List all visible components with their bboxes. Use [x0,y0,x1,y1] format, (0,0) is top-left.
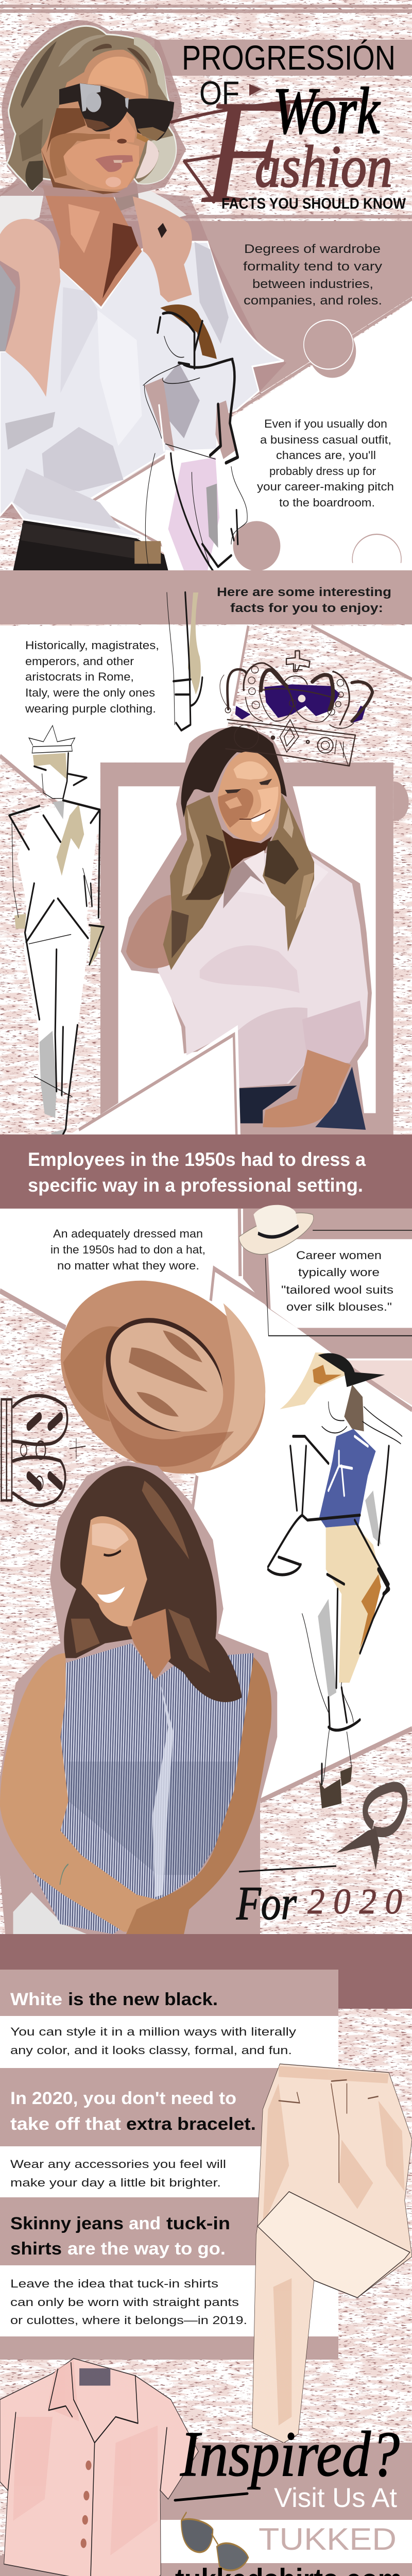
left hair [163,795,232,970]
heading: white is the new black [10,1990,218,2009]
heading: skinny jeans: are the way to go. [67,2239,226,2259]
illustration: beige trousers [252,2064,412,2443]
text block: business casual: chances are, you'll [276,449,376,462]
panel: purple clothing shapes [0,626,412,1134]
face [81,1516,147,1626]
title: For 2020 [236,1866,402,1929]
illustration: woman in white shirt, body [0,181,286,570]
text block: career women: over silk blouses." [286,1300,392,1313]
white trousers [13,1892,87,1934]
scarf ties [329,1436,368,1496]
text block: wardrobe formality [243,242,382,308]
heading: interesting facts [217,585,391,615]
line work [268,1402,402,1784]
illustration: cream hat [239,1205,314,1255]
ring [158,223,167,238]
heading: extra bracelet [10,2089,256,2134]
illustration: pink shirt [0,2359,198,2576]
ear gap [135,140,159,179]
text block: business casual [257,417,394,509]
title: Fashion: ashion [255,134,392,199]
sketch figure: lower legs [167,592,202,731]
text block: white: You can style it in a million ways with literally [10,2025,296,2038]
illustration: woman in white shirt, hands and sketch overlay [0,196,247,570]
shirt wash [13,2361,158,2555]
trousers [318,1490,381,1698]
text block: white: any color, and it looks classy, formal, and fun. [10,2044,292,2057]
halo [121,727,372,1134]
eyes [225,779,272,793]
icon: play triangle [249,84,265,96]
heading: skinny jeans: and [129,2214,161,2233]
text block: tuck-in [10,2277,247,2327]
placket [152,1683,174,1897]
shirt shading [0,242,229,529]
face tones [218,761,278,835]
text block: white [10,2025,296,2057]
text block: accessories [10,2158,226,2189]
sketch figure: skin and torso [145,378,236,459]
hat light rim [210,1303,265,1468]
title: OF: OF [199,74,239,112]
line work [9,753,104,1148]
hair strands [19,35,176,191]
heading: white is the new black: is the new black. [68,1990,218,2009]
text block: career women [281,1249,393,1313]
text block: business casual: a business casual outfit, [260,433,391,446]
heading: interesting facts: facts for you to enjoy: [230,601,383,615]
dark crown of hair [181,726,287,818]
forearm [263,1049,351,1127]
neck [220,828,272,869]
text block: tuck-in: can only be worn with straight pants [10,2296,239,2309]
head halo [0,20,186,197]
hat shadow rim [105,1402,234,1467]
text block: Roman purple [25,639,159,715]
sketch figure: hair and head [160,304,217,359]
band: interesting facts [0,570,412,624]
neck [126,1609,171,1680]
text block: tuck-in: Leave the idea that tuck-in shirts [10,2277,218,2290]
text block: wardrobe formality: companies, and roles. [244,294,382,308]
crown arches [220,651,372,728]
heading: skinny jeans: Skinny jeans [10,2214,124,2233]
eye and smile [97,1551,125,1603]
hair [7,26,176,191]
sketch figure: career woman [268,1352,402,1808]
collar [223,850,264,908]
face tones [41,57,146,194]
heading: 1950s [28,1149,366,1196]
text block: Roman purple: Historically, magistrates, [25,639,159,652]
lips [95,155,133,172]
crown shading [129,1330,208,1417]
bracelet [60,1864,68,1885]
left hand [0,219,60,397]
text block: 1950s man: no matter what they wore. [57,1259,199,1272]
callout box [265,1230,412,1336]
striped top [33,1643,253,1934]
halo [0,1461,277,1934]
halo outline [0,181,286,519]
face [41,50,148,194]
panel: 1950s shapes [0,1209,412,1801]
heading: extra bracelet: take off that [10,2114,121,2134]
sketch figure: crowned figure [9,725,104,1148]
text block: 1950s man [50,1227,205,1272]
text block: Roman purple: Italy, were the only ones [25,686,155,699]
text block: Roman purple: emperors, and other [25,655,134,668]
shirt [0,242,284,538]
heading: 1950s: Employees in the 1950s had to dress a [28,1149,366,1170]
white triangle cut-out [70,1025,241,1134]
heading: skinny jeans: shirts [10,2239,62,2259]
buttons [81,2461,92,2548]
hair [344,1384,364,1431]
blue top [319,1429,376,1528]
face highlight [92,1523,129,1550]
text block: career women: Career women [296,1249,382,1262]
band: 1950s heading [0,1134,412,1209]
collar line work [8,2363,167,2576]
title: Fashion: F [200,69,291,234]
corner chevron [211,1269,279,1311]
boots [319,1767,352,1808]
heading: skinny jeans [10,2214,230,2259]
illustration: woman in striped top [0,1461,277,1934]
heading: white is the new black: White [10,1990,62,2009]
neck and chest [42,185,142,306]
pocket and fly details [279,2080,379,2183]
text block: wardrobe formality: Degrees of wardrobe [244,242,381,256]
hat crown [101,1302,228,1447]
illustration: crown side view [2,1396,85,1505]
top double rule [0,5,412,218]
crown band [226,720,355,766]
title: For 2020: 2 0 2 0 [307,1882,402,1922]
logo: Tukked: TUKKED [259,2522,397,2556]
smile [239,810,270,822]
sketch figure: line work [143,313,247,544]
text block: tuck-in: or culottes, where it belongs—in 2019. [10,2314,247,2327]
intro panel shapes [0,221,412,584]
illustration: woman in white shirt, head [0,20,186,197]
hat dark patches [63,1326,121,1421]
panel: call to action [0,2443,412,2576]
shirt [158,853,368,1088]
text block: wardrobe formality: formality tend to vary [243,260,382,274]
illustration: woman in pink shirt, body [121,727,372,1134]
band: 2020 header [0,1934,412,2009]
text block: 1950s man: An adequately dressed man [53,1227,203,1240]
illustration: brown felt hat [54,1258,272,1497]
illustration: crown with purple lining [220,651,372,766]
text block: Roman purple: wearing purple clothing. [25,702,156,715]
text block: business casual: to the boardroom. [279,496,375,509]
text block: accessories: Wear any accessories you feel will [10,2158,226,2171]
right hair shading [264,807,314,921]
panel: 2020 tips [0,1970,338,2360]
photo frame [100,762,409,1134]
text block: 1950s man: in the 1950s had to don a hat, [50,1243,205,1256]
heading: extra bracelet: In 2020, you don't need to [10,2089,236,2108]
call to action: Visit Us At: Visit Us At [274,2483,397,2513]
right arm [126,1657,271,1934]
jeans [239,1066,366,1130]
hat [280,1352,385,1409]
illustration: sunglasses [181,2512,248,2570]
text block: business casual: your career-making pitch [257,480,394,493]
heading: 1950s: specific way in a professional setting. [28,1175,363,1196]
heading: skinny jeans: tuck-in [166,2214,230,2233]
trouser shading [263,2066,405,2426]
text block: accessories: make your day a little bit brighter. [10,2176,221,2189]
illustration: silk scarf [336,1787,405,1870]
text block: wardrobe formality: between industries, [252,277,373,291]
pants and belt [13,519,181,570]
waist shading [68,1761,236,1875]
face [218,752,281,841]
text block: career women: "tailored wool suits [281,1283,393,1296]
head [33,753,71,799]
hair highlights [71,1481,210,1673]
grey accents [40,800,66,1142]
left hair shading [171,807,230,958]
shirt folds [200,857,365,1088]
heading: interesting facts: Here are some interesting [217,585,391,599]
shoulder [126,895,174,968]
right hand [133,196,192,302]
top-right stripes [238,1209,412,1410]
beige hair and scarf [14,753,104,967]
title: Fashion [171,69,392,234]
sketch figure: skirt [145,444,231,570]
title banner [154,40,412,76]
left arm [0,1653,158,1934]
title: For 2020: For [236,1877,297,1929]
sunglasses [59,83,174,143]
text block: business casual: Even if you usually don [264,417,387,430]
right hair [263,793,314,952]
neck label [79,2368,110,2386]
text block: career women: typically wore [298,1266,380,1279]
panel: header area [0,5,412,584]
white suit fill [17,804,100,1083]
heading: extra bracelet: extra bracelet. [126,2114,256,2134]
hair [60,1466,242,1702]
crown [29,725,75,753]
collar [0,181,186,234]
illustration: woman in pink shirt, head and hair [163,726,314,970]
text block: business casual: probably dress up for [269,465,376,478]
title: Work: Work [273,74,381,147]
folded leg [258,2192,410,2298]
crown velvet [235,684,366,723]
text block: Roman purple: aristocrats in Rome, [25,670,134,683]
